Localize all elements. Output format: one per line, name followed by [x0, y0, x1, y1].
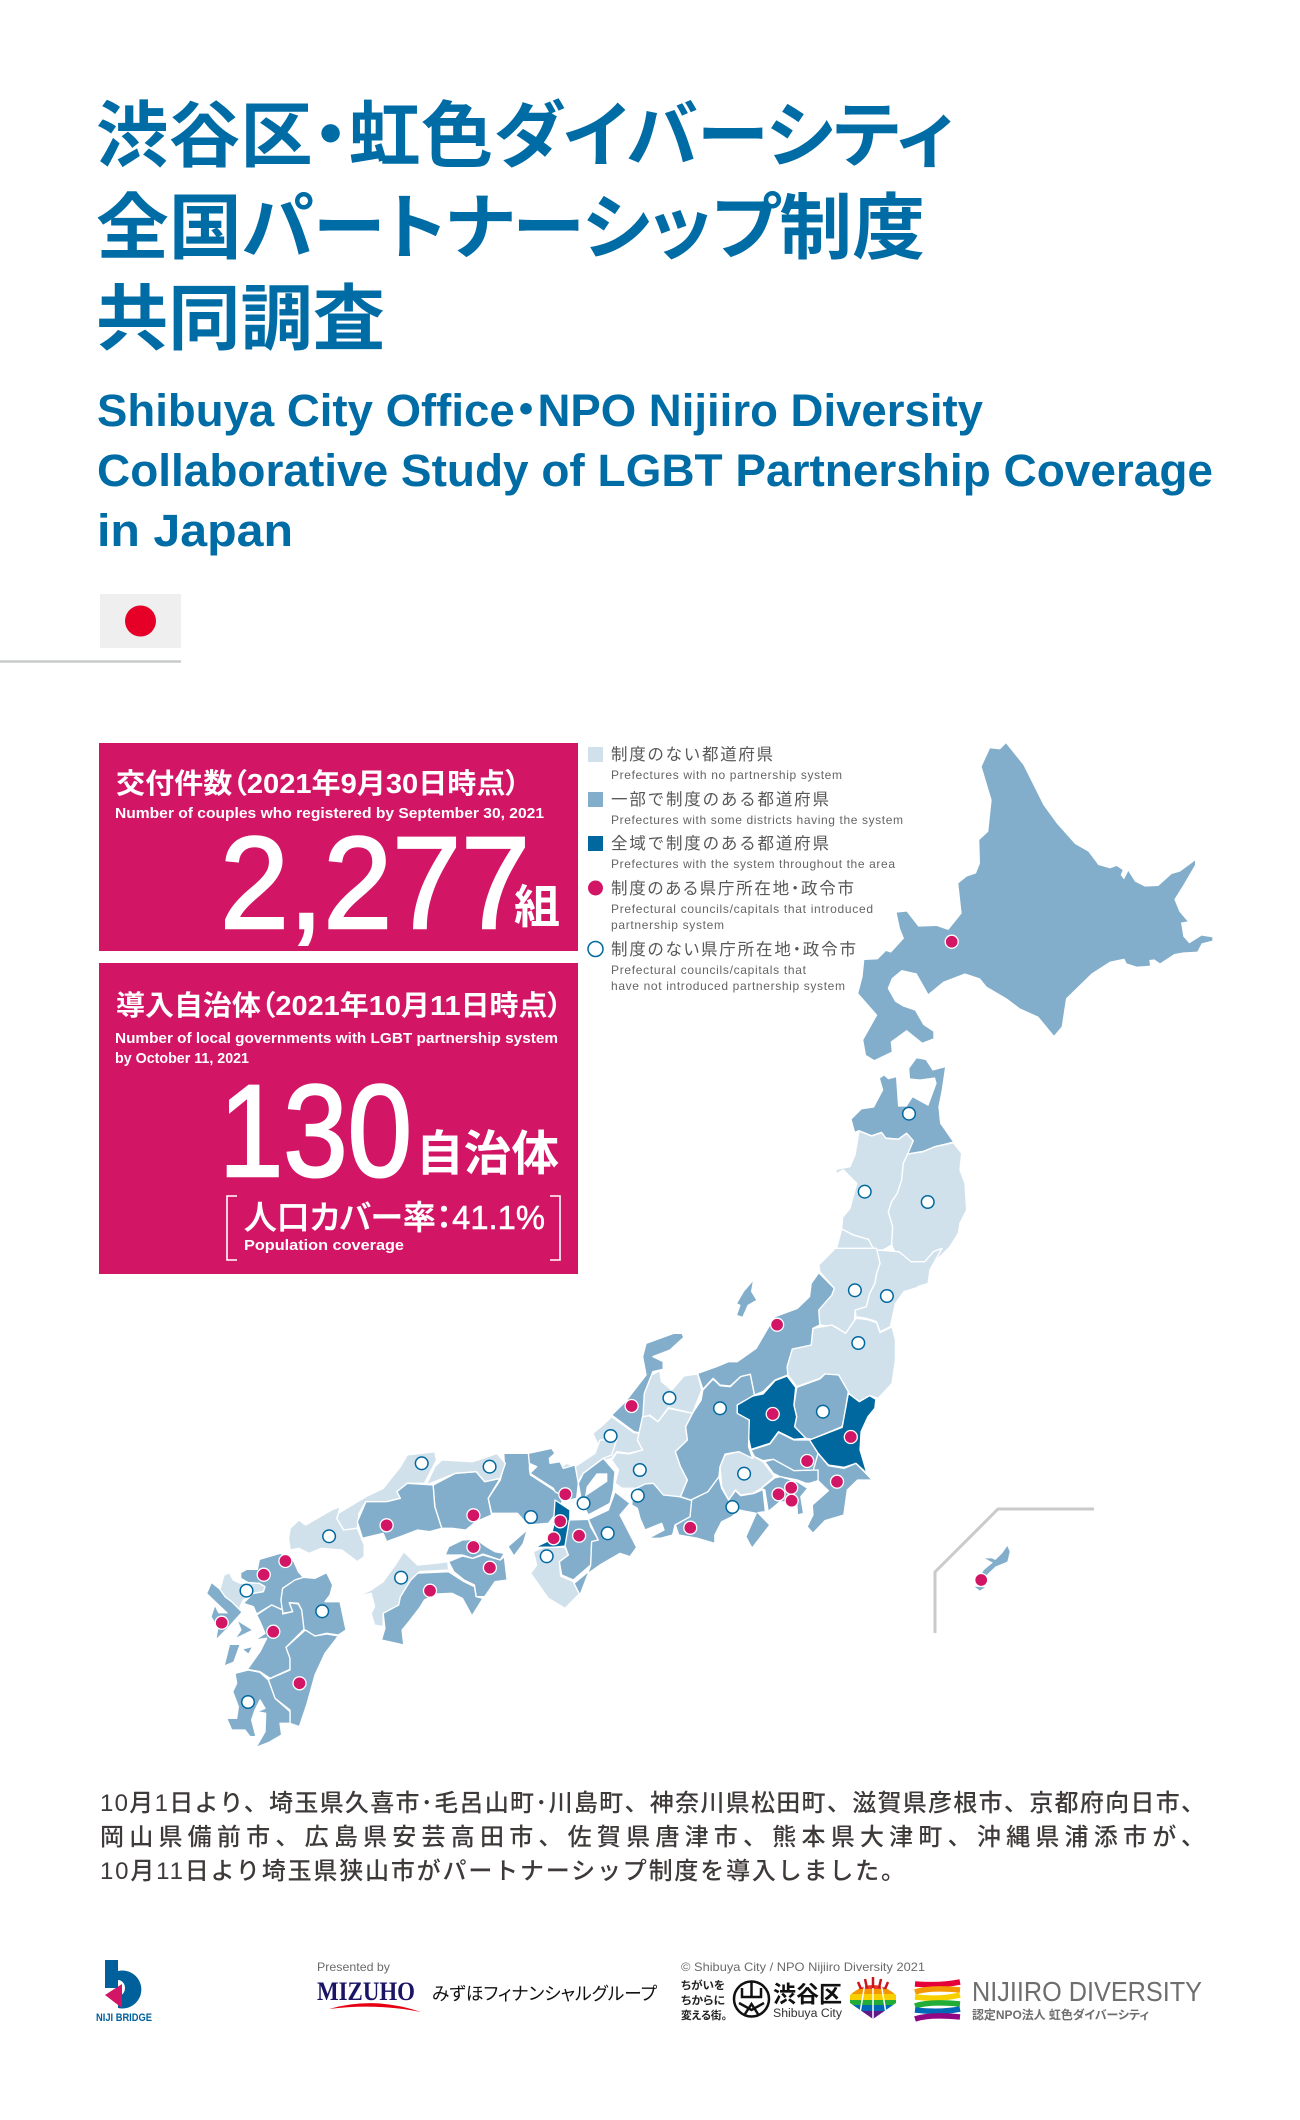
- panel: local governments: by October 11, 2021: [115, 1050, 249, 1067]
- map: Chugoku and Shikoku: [288, 1452, 562, 1645]
- panel: registered couples: [99, 743, 578, 956]
- legend: [588, 745, 903, 993]
- logo: Shibuya City: ちからに: [681, 1994, 725, 2007]
- logo: Presented by Mizuho: MIZUHO: [317, 1977, 415, 2006]
- legend: partnership system: [611, 918, 724, 932]
- panel: local governments: Number of local governments with LGBT partnership system: [115, 1030, 558, 1047]
- legend: Prefectures with the system throughout the area: [611, 857, 895, 871]
- markers: capitals with partnership system: [215, 935, 988, 1690]
- logo: Nijiiro Diversity: 認定NPO法人 虹色ダイバーシティ: [972, 2007, 1149, 2022]
- body text: 10月11日より埼玉県狭山市がパートナーシップ制度を導入しました。: [100, 1858, 905, 1885]
- legend: 一部で制度のある都道府県: [611, 790, 829, 809]
- legend: 制度のない都道府県: [611, 745, 773, 764]
- title: 全国パートナーシップ制度: [96, 189, 925, 269]
- subtitle in English: Collaborative Study of LGBT Partnership Coverage: [97, 445, 1213, 496]
- panel: registered couples: 交付件数（2021年9月30日時点）: [116, 768, 520, 799]
- logo: Presented by Mizuho: Presented by: [317, 1960, 390, 1974]
- logo: Shibuya City: [681, 1978, 842, 2022]
- panel: local governments: 人口カバー率：41.1%: [244, 1199, 545, 1236]
- map: Hokkaido and northern Tohoku: [834, 743, 1212, 1263]
- copyright: © Shibuya City / NPO Nijiiro Diversity 2021: [681, 1960, 925, 1974]
- markers: capitals without partnership system: [240, 1107, 934, 1708]
- body text: 岡山県備前市、広島県安芸高田市、佐賀県唐津市、熊本県大津町、沖縄県浦添市が、: [100, 1824, 1205, 1851]
- logo: Shibuya City: ちがいを: [681, 1978, 725, 1992]
- logo: Shibuya City: 渋谷区: [773, 1981, 842, 2007]
- legend: Prefectural councils/capitals that introduced: [611, 902, 873, 916]
- logo: Shibuya City: Shibuya City: [773, 2008, 842, 2020]
- logo: Shibuya City: 変える街。: [681, 2008, 727, 2022]
- panel: registered couples: Number of couples who registered by September 30, 2021: [115, 805, 544, 822]
- panel: registered couples: 組: [514, 881, 560, 933]
- logo: Nijiiro Diversity: NIJIIRO DIVERSITY: [972, 1976, 1202, 2007]
- legend: have not introduced partnership system: [611, 979, 845, 993]
- inset frame for Okinawa: [935, 1509, 1094, 1633]
- subtitle in English: [97, 385, 1213, 556]
- panel: registered couples: 2,277: [220, 809, 530, 956]
- body text: [100, 1790, 1205, 1885]
- title: 共同調査: [96, 280, 385, 360]
- title: [96, 97, 954, 360]
- logo: Niji Bridge: NIJI BRIDGE: [96, 2012, 152, 2024]
- logo: Nijiiro Diversity: [915, 1976, 1202, 2022]
- panel: local governments: 導入自治体（2021年10月11日時点）: [116, 990, 562, 1021]
- subtitle in English: in Japan: [97, 505, 293, 556]
- map: Okinawa: [975, 1546, 1010, 1591]
- logo: Presented by Mizuho: [317, 1960, 657, 2012]
- map of Japan: [207, 743, 1212, 1747]
- panel: local governments: 自治体: [416, 1128, 559, 1181]
- panel: local governments: Population coverage: [244, 1237, 404, 1254]
- legend: 制度のない県庁所在地・政令市: [611, 940, 856, 959]
- panel: local governments: 130: [219, 1057, 412, 1204]
- legend: Prefectures with no partnership system: [611, 768, 842, 782]
- panel: local governments: [99, 963, 578, 1274]
- logo: rainbow fan: [850, 1977, 896, 2019]
- legend: Prefectural councils/capitals that: [611, 963, 807, 977]
- map: Kyushu: [207, 1553, 346, 1747]
- logo: Niji Bridge: [96, 1960, 152, 2024]
- body text: 10月1日より、埼玉県久喜市･毛呂山町･川島町、神奈川県松田町、滋賀県彦根市、京都府向日市、: [100, 1790, 1205, 1817]
- legend: Prefectures with some districts having the system: [611, 813, 903, 827]
- subtitle in English: Shibuya City Office・NPO Nijiiro Diversity: [97, 385, 983, 436]
- title: 渋谷区・虹色ダイバーシティ: [96, 97, 954, 177]
- map: Kinki and Aichi: [528, 1440, 692, 1608]
- logo: Presented by Mizuho: みずほフィナンシャルグループ: [432, 1984, 657, 2004]
- legend: 全域で制度のある都道府県: [611, 834, 829, 853]
- map: Kanto, Chubu and southern Tohoku: [593, 1248, 942, 1548]
- icon: Japanese flag: [100, 594, 181, 648]
- legend: 制度のある県庁所在地・政令市: [611, 879, 854, 898]
